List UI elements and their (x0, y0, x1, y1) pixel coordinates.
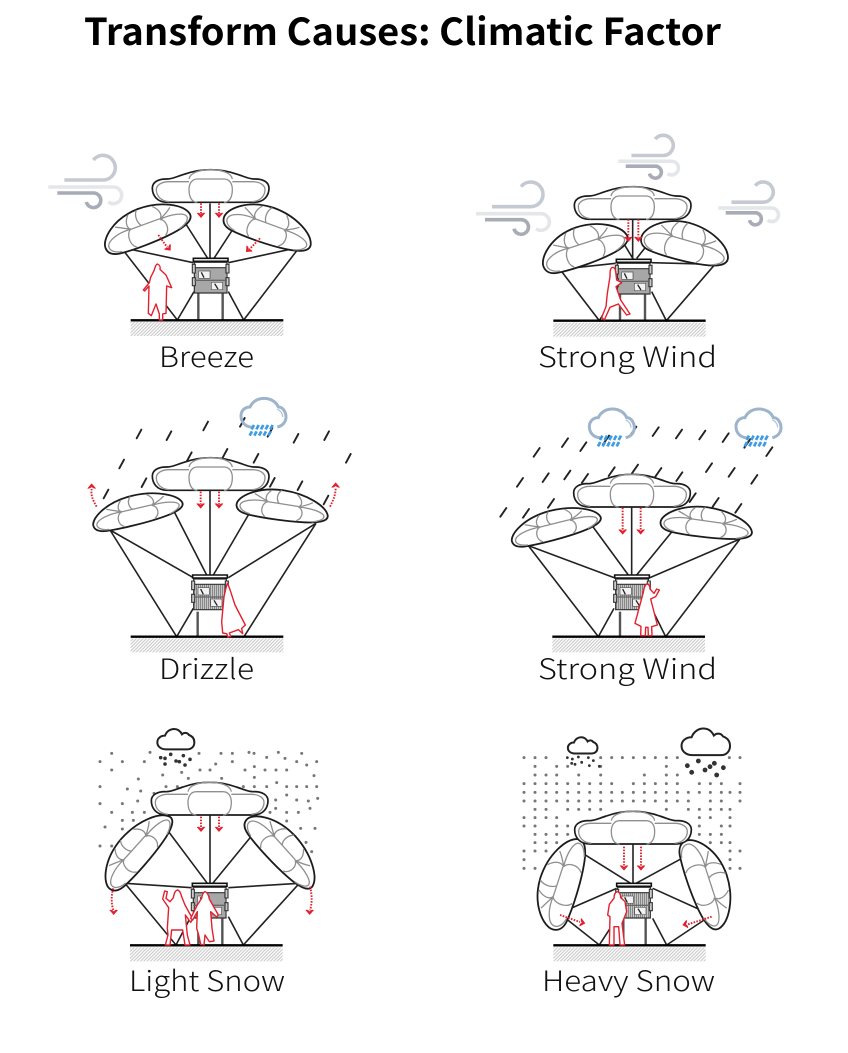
rain (500, 427, 772, 518)
icons: wind (476, 135, 778, 234)
icon: snow cloud (157, 729, 194, 765)
kiosk (616, 883, 652, 945)
cables (110, 491, 316, 637)
cables (528, 507, 740, 637)
canopies (91, 782, 328, 896)
ground (552, 637, 705, 652)
label: Light Snow (129, 960, 285, 1000)
canopies (526, 811, 742, 934)
icon: wind (48, 155, 122, 208)
cables (559, 844, 712, 945)
person (635, 584, 659, 636)
kiosk (615, 259, 652, 321)
panel: drizzle (87, 398, 351, 688)
icons: snow clouds (567, 729, 730, 775)
icons: rain clouds (589, 409, 781, 446)
person (222, 583, 245, 637)
person (608, 892, 627, 945)
panel: strong wind (476, 135, 778, 376)
ground (131, 637, 283, 652)
cables (125, 815, 299, 945)
ground (130, 945, 283, 961)
red arrows (158, 203, 260, 255)
snow dots (524, 758, 740, 868)
red arrows (624, 219, 643, 242)
ground (131, 320, 283, 336)
ground (553, 945, 706, 961)
cables (121, 203, 299, 320)
canopies (507, 474, 755, 550)
person (143, 264, 172, 320)
rain (104, 418, 351, 504)
panel: breeze (48, 155, 318, 376)
panel: strong rain (500, 409, 781, 688)
panel: heavy snow (524, 729, 742, 1000)
label: Strong Wind (538, 648, 717, 688)
cables (560, 219, 715, 321)
label: Heavy Snow (542, 960, 715, 1000)
label: Drizzle (159, 648, 254, 688)
canopies (97, 170, 318, 259)
icon: rain cloud (241, 398, 286, 436)
person (602, 267, 630, 320)
snow dots (100, 752, 318, 852)
label: Breeze (159, 336, 254, 376)
kiosk (614, 575, 650, 637)
kiosk (192, 258, 229, 320)
canopies (535, 187, 734, 277)
red arrows (560, 847, 712, 929)
panel: light snow (91, 729, 328, 1000)
red arrows (87, 482, 340, 509)
red arrows (109, 817, 314, 915)
title: Transform Causes: Climatic Factor (84, 2, 722, 56)
label: Strong Wind (538, 336, 717, 376)
ground (553, 321, 706, 337)
people (163, 890, 218, 945)
canopies (89, 458, 331, 534)
red arrows (618, 508, 645, 535)
kiosk (192, 575, 228, 637)
kiosk (191, 883, 228, 945)
